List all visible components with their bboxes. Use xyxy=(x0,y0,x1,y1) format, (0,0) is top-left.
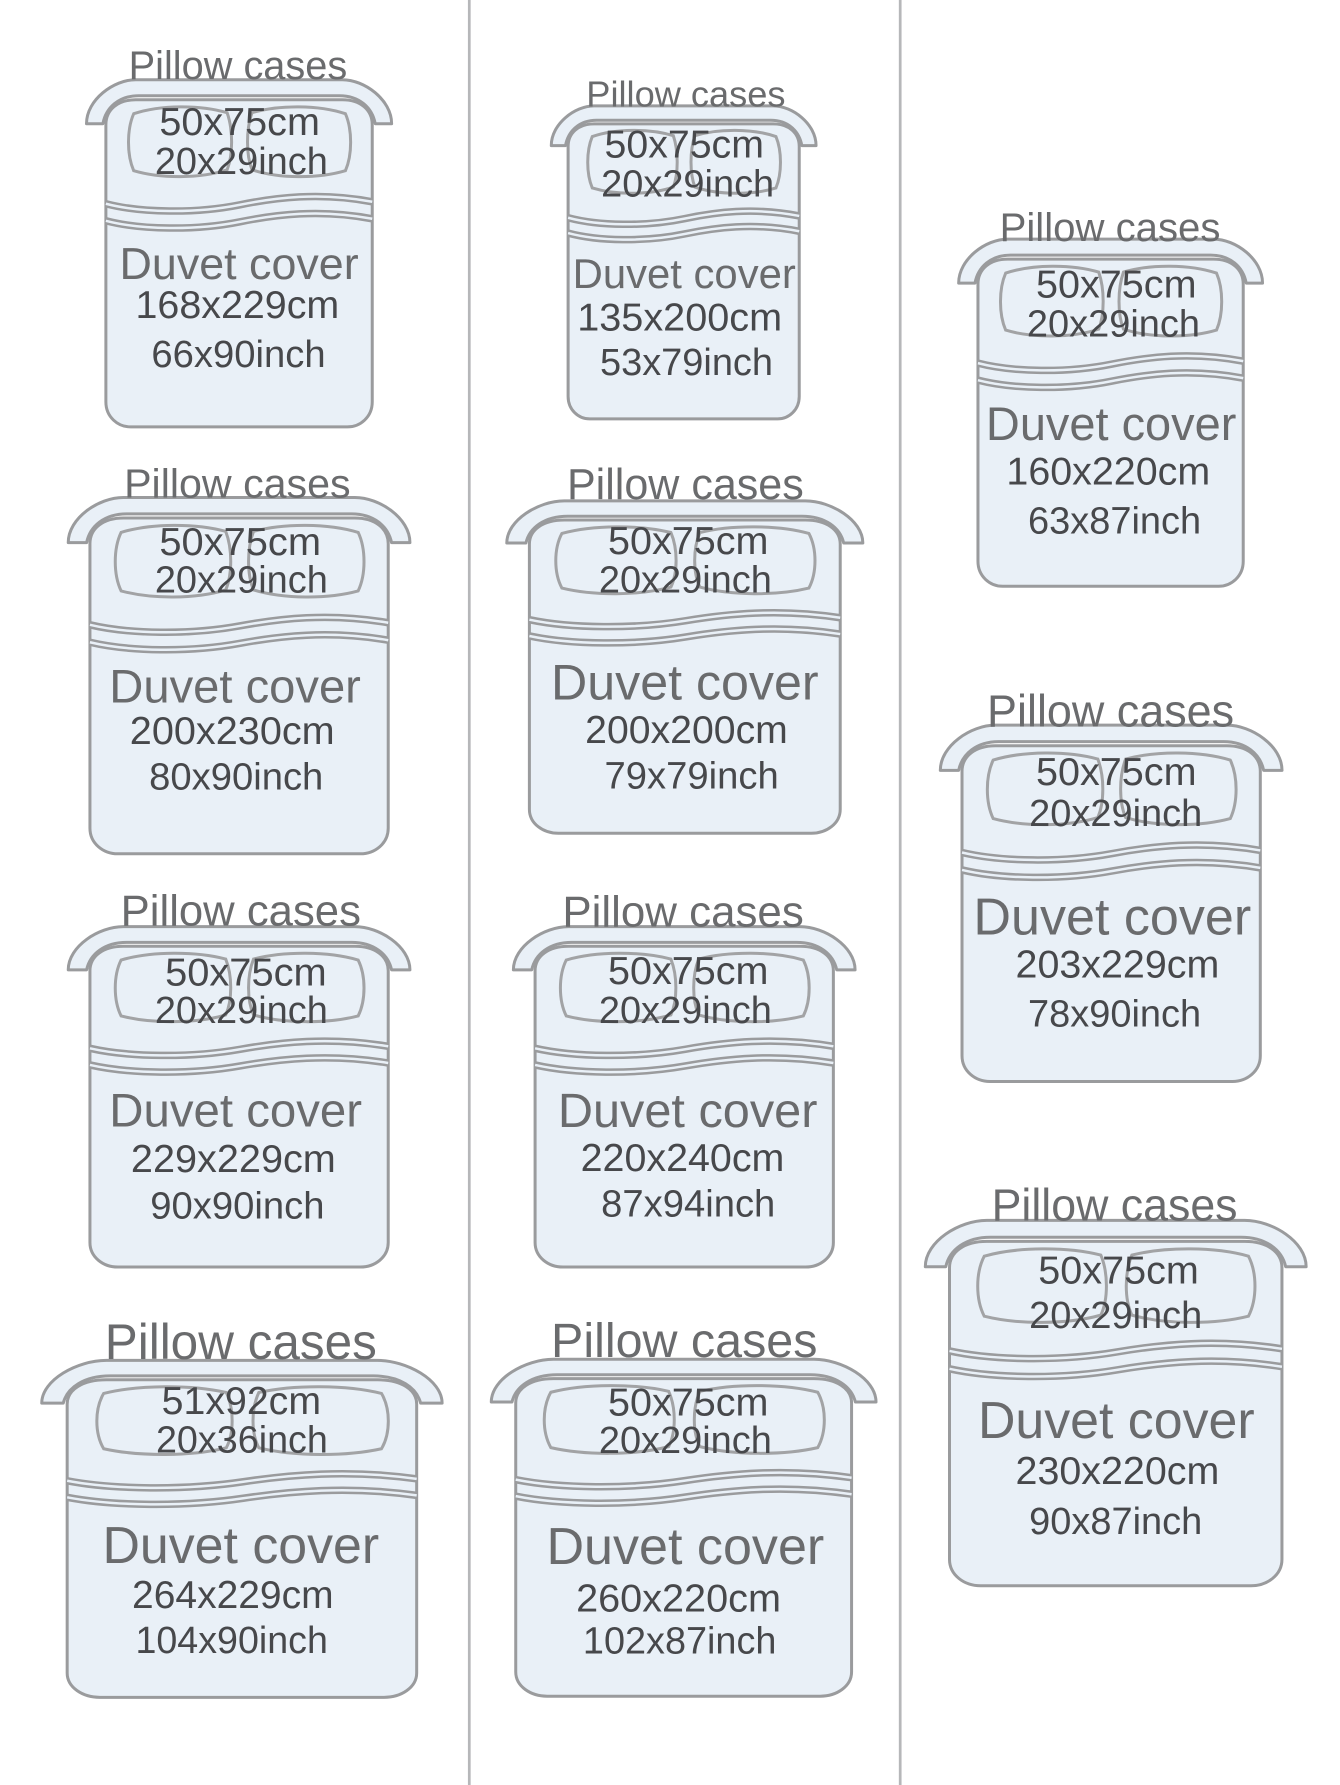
duvet size cm: 168x229cm xyxy=(135,283,339,327)
label: pillow cases: Pillow cases xyxy=(121,887,361,936)
pillow size cm: 50x75cm xyxy=(159,520,321,564)
panel: bed 200x230cm xyxy=(68,460,410,854)
duvet size inch: 102x87inch xyxy=(583,1621,776,1663)
panel: bed 200x200cm xyxy=(507,461,863,833)
label: pillow cases: Pillow cases xyxy=(551,1314,817,1368)
duvet size cm: 200x200cm xyxy=(585,708,788,752)
label: duvet cover: Duvet cover xyxy=(573,250,796,297)
pillow size cm: 50x75cm xyxy=(165,950,327,994)
icon: bed outline xyxy=(86,80,392,427)
label: duvet cover: Duvet cover xyxy=(973,889,1251,947)
duvet size inch: 66x90inch xyxy=(151,334,326,376)
icon: bed outline xyxy=(551,106,816,419)
duvet size cm: 200x230cm xyxy=(130,709,335,753)
pillow size cm: 51x92cm xyxy=(162,1379,321,1423)
duvet size inch: 104x90inch xyxy=(135,1620,328,1662)
panel: bed 168x229cm xyxy=(86,44,392,427)
duvet size inch: 87x94inch xyxy=(601,1183,775,1225)
duvet size inch: 79x79inch xyxy=(605,755,779,797)
duvet size cm: 220x240cm xyxy=(581,1136,784,1180)
panel: bed 264x229cm xyxy=(42,1314,442,1697)
pillow size inch: 20x36inch xyxy=(156,1420,328,1462)
pillow size inch: 20x29inch xyxy=(601,163,774,205)
duvet size inch: 90x90inch xyxy=(150,1186,324,1228)
icon: bed outline xyxy=(68,497,410,854)
pillow size inch: 20x29inch xyxy=(599,560,772,602)
label: duvet cover: Duvet cover xyxy=(546,1518,824,1576)
icon: bed outline xyxy=(959,239,1263,586)
label: pillow cases: Pillow cases xyxy=(124,460,351,506)
pillow size inch: 20x29inch xyxy=(155,141,328,183)
duvet size cm: 203x229cm xyxy=(1016,942,1219,986)
icon: bed outline xyxy=(925,1220,1306,1586)
pillow size cm: 50x75cm xyxy=(608,1381,768,1425)
duvet size inch: 90x87inch xyxy=(1029,1501,1202,1543)
label: pillow cases: Pillow cases xyxy=(992,1179,1238,1230)
duvet size inch: 80x90inch xyxy=(149,756,323,798)
label: duvet cover: Duvet cover xyxy=(102,1517,379,1575)
label: duvet cover: Duvet cover xyxy=(120,238,359,289)
panel: bed 160x220cm xyxy=(959,206,1263,586)
duvet size cm: 230x220cm xyxy=(1016,1449,1219,1493)
duvet size cm: 264x229cm xyxy=(132,1573,334,1617)
duvet size inch: 63x87inch xyxy=(1028,500,1201,542)
label: pillow cases: Pillow cases xyxy=(129,44,347,88)
panel: bed 260x220cm xyxy=(491,1314,876,1696)
pillow size cm: 50x75cm xyxy=(1036,750,1197,794)
duvet size cm: 135x200cm xyxy=(577,296,782,340)
panel: bed 229x229cm xyxy=(68,887,410,1267)
label: pillow cases: Pillow cases xyxy=(586,73,786,114)
pillow size inch: 20x29inch xyxy=(1029,793,1202,835)
panel: bed 220x240cm xyxy=(513,888,855,1267)
duvet size cm: 260x220cm xyxy=(576,1576,781,1620)
pillow size inch: 20x29inch xyxy=(155,990,328,1032)
column divider right xyxy=(899,0,902,1785)
icon: bed outline xyxy=(68,927,410,1267)
label: duvet cover: Duvet cover xyxy=(551,655,819,711)
label: duvet cover: Duvet cover xyxy=(558,1084,817,1138)
label: duvet cover: Duvet cover xyxy=(109,659,361,712)
pillow size inch: 20x29inch xyxy=(599,1420,772,1462)
duvet size cm: 229x229cm xyxy=(131,1137,336,1181)
pillow size cm: 50x75cm xyxy=(608,949,768,993)
pillow size cm: 50x75cm xyxy=(608,519,768,563)
pillow size inch: 20x29inch xyxy=(599,990,772,1032)
pillow size cm: 50x75cm xyxy=(159,100,320,144)
label: pillow cases: Pillow cases xyxy=(987,685,1234,736)
pillow size cm: 50x75cm xyxy=(1036,263,1197,307)
duvet size inch: 78x90inch xyxy=(1028,993,1201,1035)
icon: bed outline xyxy=(513,927,855,1267)
label: pillow cases: Pillow cases xyxy=(1000,206,1220,250)
label: pillow cases: Pillow cases xyxy=(105,1314,377,1370)
duvet size cm: 160x220cm xyxy=(1006,449,1210,493)
icon: bed outline xyxy=(42,1360,442,1697)
panel: bed 203x229cm xyxy=(940,685,1282,1081)
duvet size inch: 53x79inch xyxy=(600,342,773,384)
panel: bed 230x220cm xyxy=(925,1179,1306,1586)
icon: bed outline xyxy=(491,1359,876,1696)
column divider left xyxy=(468,0,471,1785)
label: duvet cover: Duvet cover xyxy=(109,1084,362,1137)
icon: bed outline xyxy=(940,725,1282,1081)
panel: bed 135x200cm xyxy=(551,73,816,419)
label: pillow cases: Pillow cases xyxy=(562,888,804,937)
pillow size cm: 50x75cm xyxy=(1038,1249,1199,1293)
label: duvet cover: Duvet cover xyxy=(978,1392,1255,1450)
pillow size cm: 50x75cm xyxy=(605,123,764,167)
pillow size inch: 20x29inch xyxy=(155,560,328,602)
icon: bed outline xyxy=(507,501,863,833)
label: duvet cover: Duvet cover xyxy=(986,398,1236,450)
pillow size inch: 20x29inch xyxy=(1029,1295,1202,1337)
pillow size inch: 20x29inch xyxy=(1027,303,1200,345)
label: pillow cases: Pillow cases xyxy=(567,461,804,509)
